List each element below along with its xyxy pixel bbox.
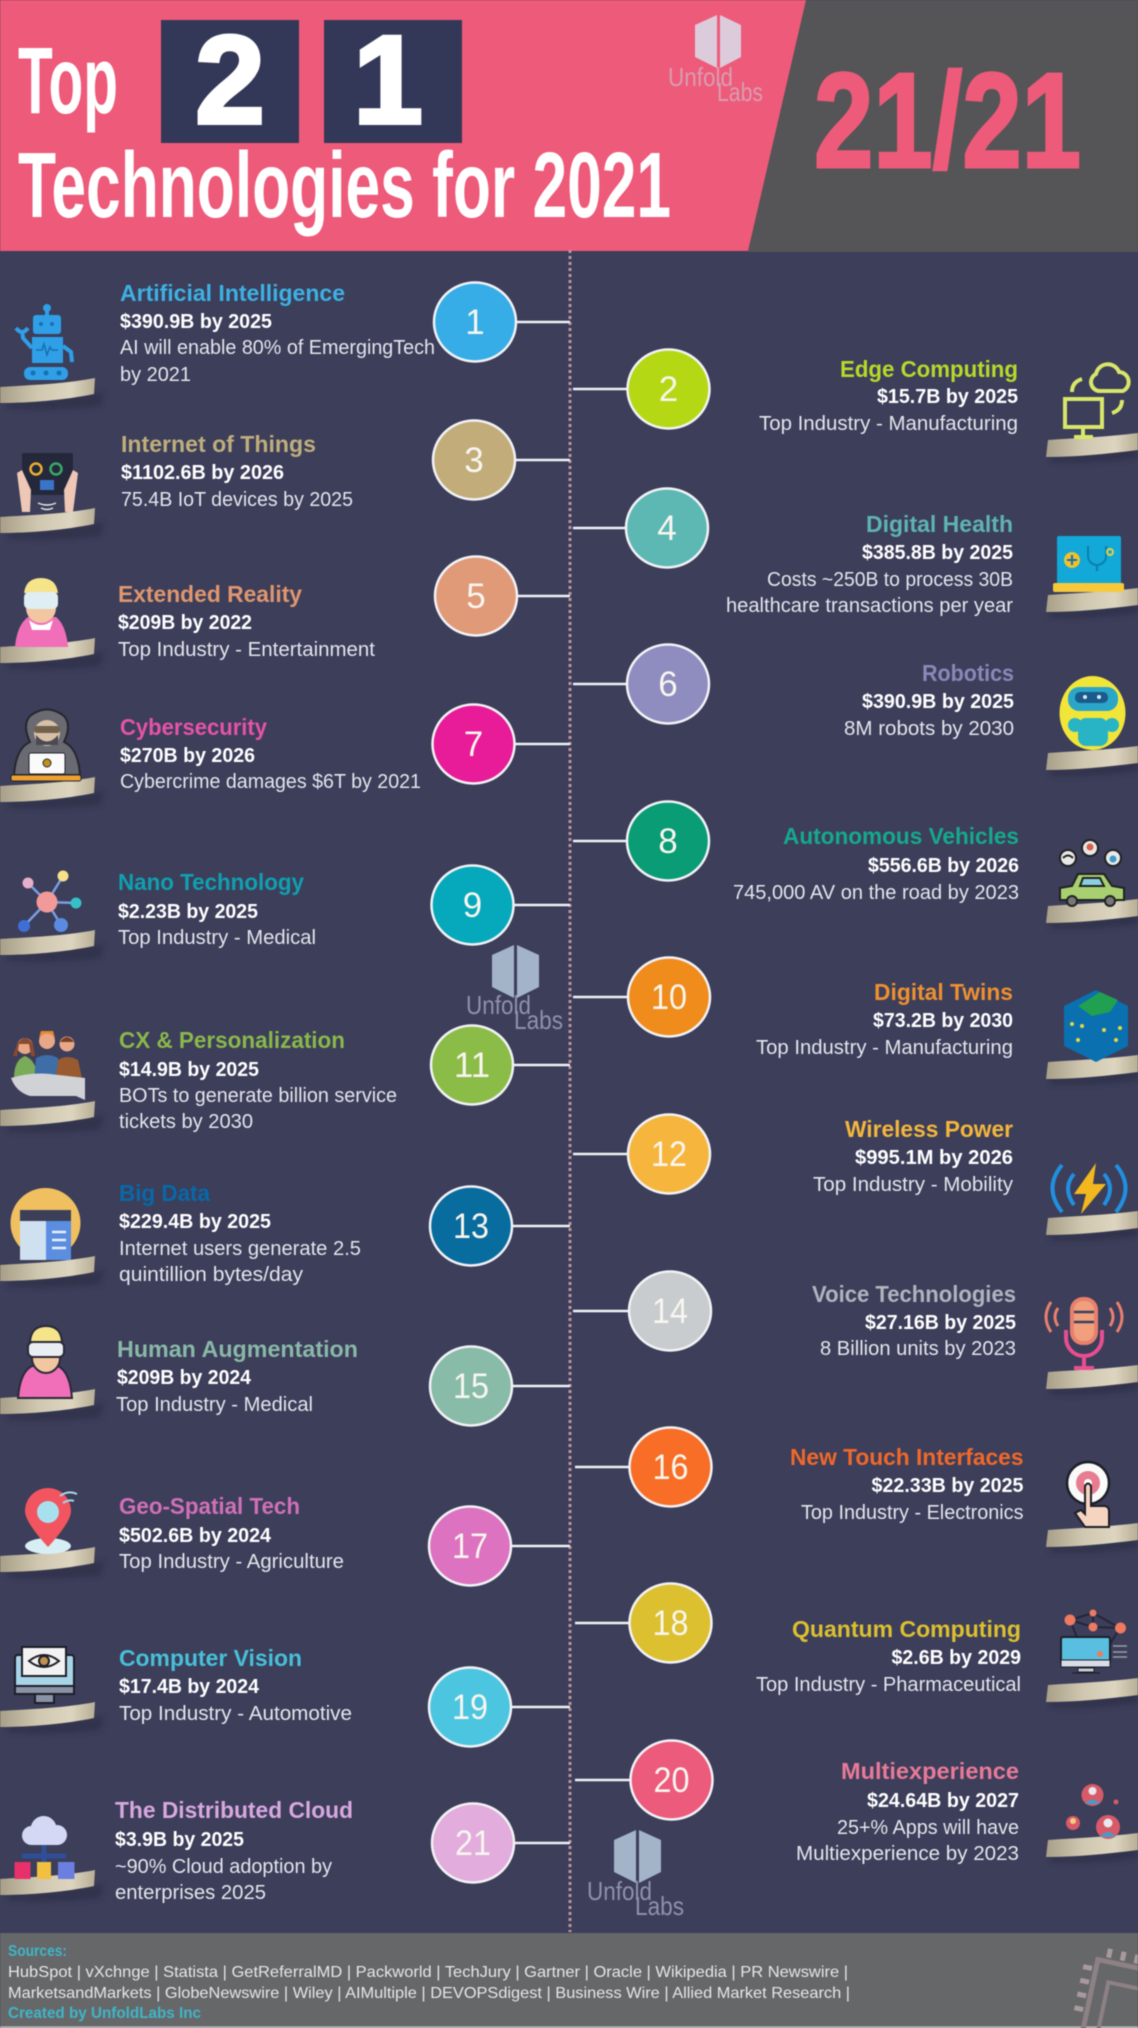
connector xyxy=(515,743,570,745)
icon: connected car xyxy=(1060,840,1124,906)
number badge xyxy=(628,1114,710,1194)
description xyxy=(796,1817,1019,1865)
description xyxy=(119,1085,397,1133)
connector xyxy=(573,683,627,685)
item 4: Digital Health xyxy=(573,488,1138,618)
icon: tablet in hands xyxy=(17,453,78,512)
number badge xyxy=(431,1026,513,1104)
item 14: Voice Technologies xyxy=(573,1272,1138,1395)
title: Digital Twins xyxy=(874,979,1013,1005)
logo: header: Unfold xyxy=(668,62,733,92)
icon: data window on yellow disc xyxy=(10,1188,80,1260)
description xyxy=(115,1856,332,1904)
market value: $17.4B by 2024 xyxy=(119,1676,260,1698)
number badge: 20 xyxy=(654,1761,690,1800)
market value: $14.9B by 2025 xyxy=(119,1059,259,1081)
market value: $556.6B by 2026 xyxy=(868,855,1019,877)
item 5: Extended Reality xyxy=(0,556,570,669)
connector xyxy=(512,1225,570,1227)
number badge: 14 xyxy=(652,1292,688,1331)
connector xyxy=(573,996,628,998)
description xyxy=(726,569,1013,617)
item 8: Autonomous Vehicles xyxy=(573,802,1138,929)
number badge: 7 xyxy=(464,725,483,764)
connector xyxy=(575,1779,630,1781)
item 7: Cybersecurity xyxy=(0,704,570,808)
number badge xyxy=(433,420,515,500)
logo: centre watermark: Unfold xyxy=(466,990,531,1020)
number badge: 2 xyxy=(659,370,678,409)
description: Top Industry - Electronics xyxy=(801,1502,1024,1524)
icon: monitor and cloud xyxy=(1065,364,1129,437)
market value: $270B by 2026 xyxy=(120,745,255,767)
connector xyxy=(516,321,570,323)
icon: data cube xyxy=(1064,990,1128,1062)
number badge xyxy=(432,704,514,784)
icon: person with headset xyxy=(18,1326,72,1398)
title word: Top: Top xyxy=(18,28,118,134)
description: Cybercrime damages $6T by 2021 xyxy=(120,771,421,793)
title: Nano Technology xyxy=(118,869,304,895)
number badge xyxy=(430,1186,512,1266)
title: Big Data xyxy=(119,1180,210,1206)
icon: people on a hand xyxy=(11,1031,85,1100)
number badge: 1 xyxy=(465,303,485,342)
number badge xyxy=(429,1506,511,1586)
number badge: 19 xyxy=(452,1688,488,1727)
credit: Created by UnfoldLabs Inc xyxy=(8,2005,201,2022)
description: 8 Billion units by 2023 xyxy=(820,1338,1016,1360)
number badge xyxy=(432,1804,514,1882)
description: Top Industry - Pharmaceutical xyxy=(756,1674,1021,1696)
market value: $385.8B by 2025 xyxy=(862,542,1013,564)
description: BOTs to generate billion service xyxy=(119,1085,397,1107)
title: Cybersecurity xyxy=(120,714,267,740)
market value: $3.9B by 2025 xyxy=(115,1829,244,1851)
item 2: Edge Computing xyxy=(573,350,1138,463)
number badge: 21 xyxy=(455,1824,491,1863)
market value: $390.9B by 2025 xyxy=(862,691,1014,713)
item 17: Geo-Spatial Tech xyxy=(0,1488,570,1586)
title: The Distributed Cloud xyxy=(115,1797,353,1823)
item 11: CX & Personalization xyxy=(0,1026,570,1133)
description: tickets by 2030 xyxy=(119,1111,253,1133)
icon: person with VR headset xyxy=(15,578,68,647)
market value: $73.2B by 2030 xyxy=(873,1010,1013,1032)
header: grey panel xyxy=(748,0,1138,252)
connector xyxy=(573,1310,629,1312)
icon: robot xyxy=(16,304,72,380)
description: Top Industry - Manufacturing xyxy=(756,1037,1013,1059)
description: healthcare transactions per year xyxy=(726,595,1013,617)
title: Wireless Power xyxy=(845,1116,1013,1142)
title: Top 21 Technologies for 2021 xyxy=(18,11,671,237)
icon: finger touching target xyxy=(1067,1462,1109,1527)
item 6: Robotics xyxy=(573,644,1138,776)
number badge xyxy=(630,1740,712,1820)
logo: centre watermark: Labs xyxy=(514,1005,563,1035)
icon: map pin xyxy=(25,1488,77,1554)
digit tile: 2: 2 xyxy=(195,11,265,150)
market value: $209B by 2024 xyxy=(117,1367,252,1389)
description: 745,000 AV on the road by 2023 xyxy=(733,882,1019,904)
icon: cloud with blocks xyxy=(14,1816,74,1879)
number badge xyxy=(435,556,517,636)
number badge xyxy=(432,866,514,944)
description: Top Industry - Entertainment xyxy=(118,639,375,661)
icon: hooded hacker at laptop xyxy=(11,710,81,781)
market value: $1102.6B by 2026 xyxy=(121,462,284,484)
item 16: New Touch Interfaces xyxy=(575,1428,1138,1553)
number badge xyxy=(630,1584,712,1662)
description: Multiexperience by 2023 xyxy=(796,1843,1019,1865)
item 13: Big Data xyxy=(0,1180,570,1287)
number badge: 18 xyxy=(652,1604,688,1643)
header: pink panel xyxy=(0,0,806,251)
title: Digital Health xyxy=(866,511,1013,537)
description: Top Industry - Medical xyxy=(116,1394,313,1416)
number badge: 13 xyxy=(453,1207,489,1246)
market value: $24.64B by 2027 xyxy=(867,1790,1019,1812)
title: Extended Reality xyxy=(118,581,302,607)
description: Internet users generate 2.5 xyxy=(119,1238,361,1260)
item 19: Computer Vision xyxy=(0,1645,570,1746)
number badge: 16 xyxy=(652,1448,688,1487)
connector xyxy=(514,904,570,906)
number badge: 5 xyxy=(466,577,486,616)
market value: $22.33B by 2025 xyxy=(872,1475,1024,1497)
connector xyxy=(513,1064,570,1066)
sources list: HubSpot | vXchnge | Statista | GetReferralMD | Packworld | TechJury | Gartner | Oracle | Wikipedia | PR Newswire | xyxy=(8,1964,848,1981)
market value: $2.23B by 2025 xyxy=(118,901,258,923)
title: Computer Vision xyxy=(119,1645,302,1671)
title line: Technologies for 2021: Technologies for 2021 xyxy=(18,133,671,237)
number badge xyxy=(430,1346,512,1426)
connector xyxy=(573,1153,628,1155)
number badge xyxy=(628,958,710,1036)
sources list xyxy=(8,1964,850,2002)
logo: bottom watermark: Unfold xyxy=(587,1876,652,1906)
number badge xyxy=(629,1272,711,1350)
connector xyxy=(573,527,626,529)
connector xyxy=(511,1545,570,1547)
icon: monitor with eye xyxy=(15,1647,74,1703)
market value: $502.6B by 2024 xyxy=(119,1525,272,1547)
title: Robotics xyxy=(922,660,1014,686)
description: by 2021 xyxy=(120,364,191,386)
connector xyxy=(514,1842,570,1844)
description: Top Industry - Mobility xyxy=(813,1174,1013,1196)
sources list: MarketsandMarkets | GlobeNewswire | Wiley | AIMultiple | DEVOPSdigest | Business Wire | Allied Market Research | xyxy=(8,1985,850,2002)
icon: laptop with stethoscope xyxy=(1053,536,1124,592)
footer: sources panel xyxy=(0,1933,1138,2028)
connector xyxy=(511,1706,570,1708)
title: Voice Technologies xyxy=(812,1281,1016,1307)
number badge xyxy=(626,488,708,568)
item 18: Quantum Computing xyxy=(575,1584,1138,1708)
number badge: 10 xyxy=(651,978,687,1017)
icon: connected users xyxy=(1066,1784,1120,1839)
title: New Touch Interfaces xyxy=(790,1444,1024,1470)
sources heading: Sources: xyxy=(8,1943,67,1960)
logo: header xyxy=(668,15,763,107)
number badge xyxy=(434,282,516,362)
number badge: 11 xyxy=(454,1046,490,1085)
logo: bottom watermark: Labs xyxy=(635,1891,684,1921)
market value: $2.6B by 2029 xyxy=(892,1647,1021,1669)
item 10: Digital Twins xyxy=(573,958,1138,1085)
title: Geo-Spatial Tech xyxy=(119,1493,300,1519)
description: 8M robots by 2030 xyxy=(844,718,1014,740)
connector xyxy=(512,1385,570,1387)
number badge: 17 xyxy=(452,1527,488,1566)
number badge: 12 xyxy=(651,1135,687,1174)
number badge xyxy=(627,802,709,880)
number badge: 9 xyxy=(463,886,482,925)
number badge xyxy=(627,644,709,724)
market value: $229.4B by 2025 xyxy=(119,1211,271,1233)
description: enterprises 2025 xyxy=(115,1882,266,1904)
digit tile: 1 xyxy=(324,11,462,150)
description: AI will enable 80% of EmergingTech xyxy=(120,337,435,359)
number badge xyxy=(628,350,710,428)
number badge: 4 xyxy=(657,509,677,548)
market value: $390.9B by 2025 xyxy=(120,311,272,333)
number badge xyxy=(429,1668,511,1746)
connector xyxy=(515,459,570,461)
market value: $995.1M by 2026 xyxy=(855,1147,1013,1169)
connector xyxy=(575,1466,629,1468)
connector xyxy=(573,840,627,842)
digit tile: 2 xyxy=(161,11,299,150)
description: ~90% Cloud adoption by xyxy=(115,1856,332,1878)
icon: lightning with waves xyxy=(1052,1163,1126,1214)
description xyxy=(120,337,435,386)
icon: microphone xyxy=(1046,1299,1122,1368)
title: Artificial Intelligence xyxy=(120,280,345,306)
item 21: The Distributed Cloud xyxy=(0,1797,570,1904)
logo: centre watermark xyxy=(466,945,563,1035)
item 12: Wireless Power xyxy=(573,1114,1138,1241)
description: quintillion bytes/day xyxy=(119,1264,303,1286)
item 20: Multiexperience xyxy=(575,1740,1138,1865)
title: Internet of Things xyxy=(121,431,316,457)
description: Top Industry - Medical xyxy=(118,927,316,949)
icon: chip watermark xyxy=(1069,1944,1138,2028)
title: Quantum Computing xyxy=(792,1616,1021,1642)
description: Top Industry - Agriculture xyxy=(119,1551,344,1573)
description: Top Industry - Manufacturing xyxy=(759,413,1018,435)
connector xyxy=(573,388,628,390)
icon: molecule network xyxy=(18,870,82,932)
icon: round robot xyxy=(1060,676,1126,750)
market value: $15.7B by 2025 xyxy=(877,386,1018,408)
description: 25+% Apps will have xyxy=(837,1817,1019,1839)
number badge: 3 xyxy=(464,441,484,480)
connector xyxy=(575,1622,629,1624)
icon: network over monitor xyxy=(1061,1610,1127,1673)
digit tile: 1: 1 xyxy=(353,11,423,150)
description: Costs ~250B to process 30B xyxy=(767,569,1013,591)
description: Top Industry - Automotive xyxy=(119,1703,352,1725)
title: Multiexperience xyxy=(841,1758,1019,1784)
title: CX & Personalization xyxy=(119,1027,345,1053)
number badge: 6 xyxy=(658,665,678,704)
description xyxy=(119,1238,361,1286)
logo: header: Labs xyxy=(717,77,763,107)
logo: bottom watermark xyxy=(587,1830,684,1921)
title: Edge Computing xyxy=(840,356,1018,382)
number badge: 15 xyxy=(453,1367,489,1406)
timeline: dotted spine xyxy=(568,250,572,1932)
number badge: 8 xyxy=(658,822,678,861)
item 1: Artificial Intelligence xyxy=(0,280,570,409)
title: Autonomous Vehicles xyxy=(783,823,1019,849)
connector xyxy=(517,595,570,597)
item 15: Human Augmentation xyxy=(0,1326,570,1426)
item 3: Internet of Things xyxy=(0,420,570,539)
number badge xyxy=(630,1428,712,1506)
item 9: Nano Technology xyxy=(0,866,570,961)
market value: $209B by 2022 xyxy=(118,612,252,634)
title: Human Augmentation xyxy=(117,1336,358,1362)
description: 75.4B IoT devices by 2025 xyxy=(121,489,353,511)
market value: $27.16B by 2025 xyxy=(865,1312,1016,1334)
